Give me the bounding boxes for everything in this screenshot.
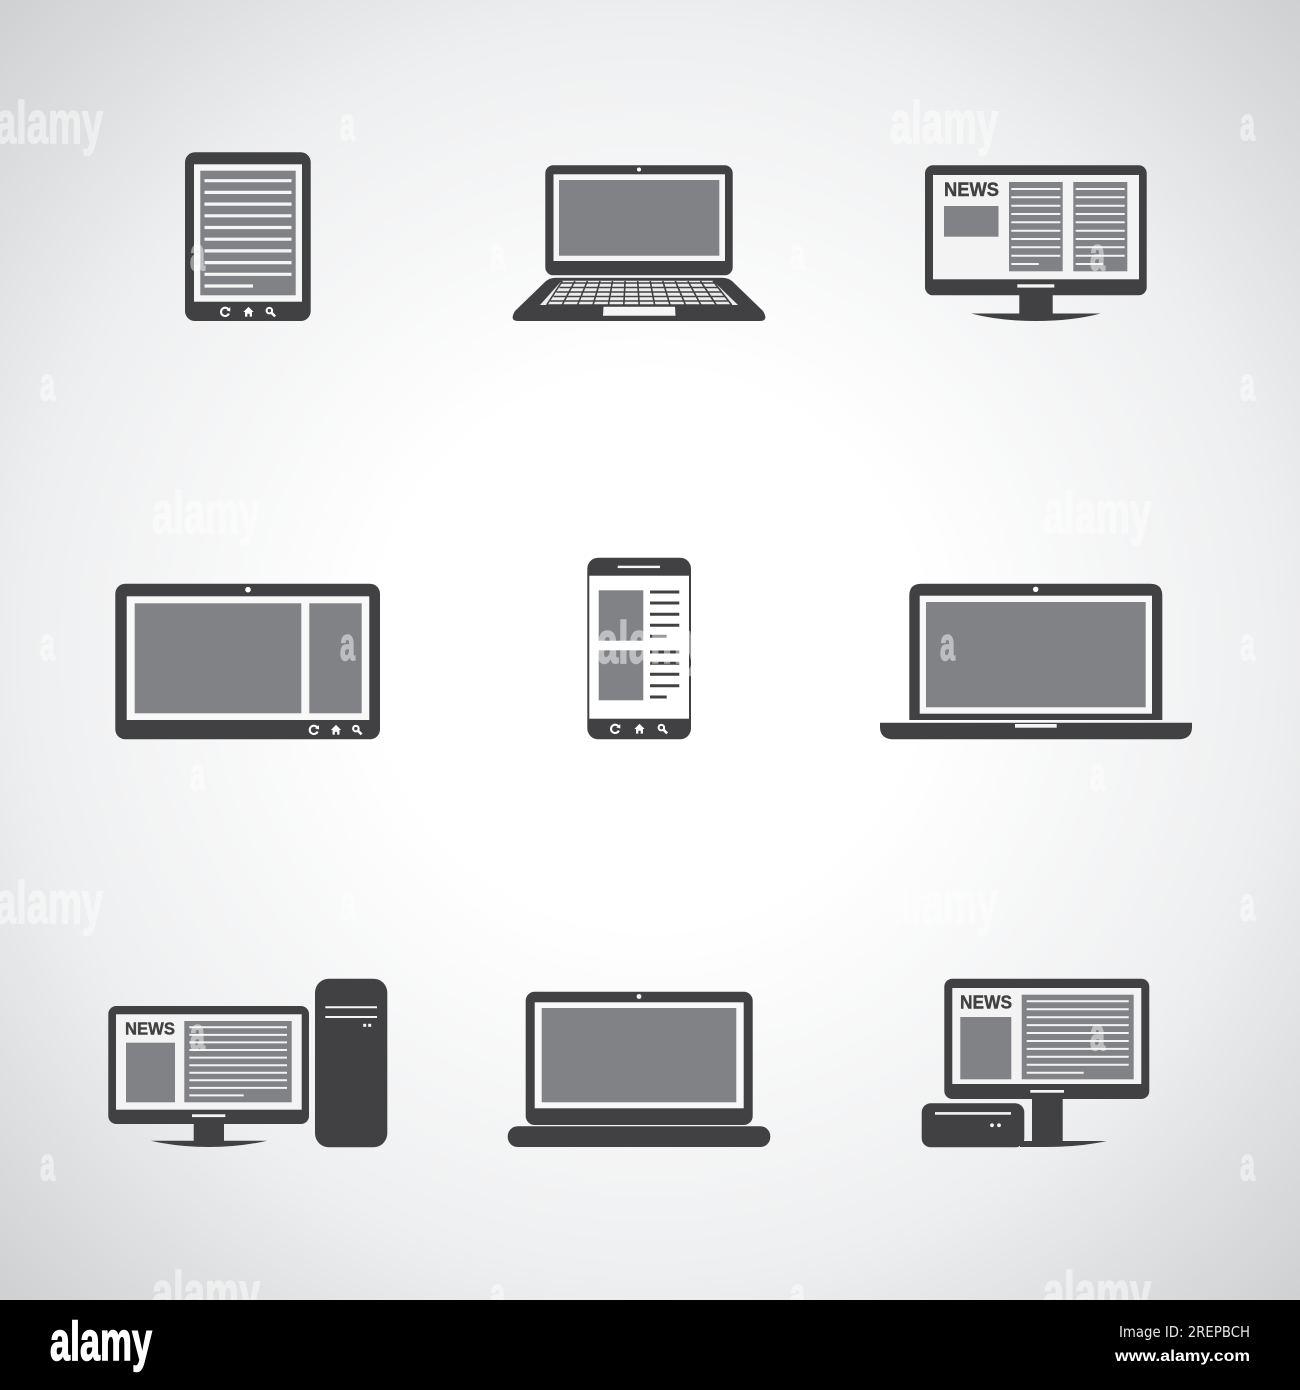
watermark pattern: a bbox=[1240, 1138, 1255, 1190]
watermark pattern: alamy bbox=[1043, 1260, 1151, 1326]
icon: laptop with keyboard bbox=[513, 165, 765, 321]
watermark pattern: alamy bbox=[597, 610, 705, 676]
watermark pattern: a bbox=[490, 228, 505, 280]
watermark pattern: a bbox=[790, 1268, 805, 1320]
watermark pattern: a bbox=[1240, 98, 1255, 150]
icon: landscape tablet bbox=[115, 584, 380, 739]
icon: monitor with mini PC bbox=[922, 979, 1149, 1147]
image id: Image ID: 2REPBCH bbox=[1119, 1323, 1250, 1341]
website: www.alamy.com bbox=[1114, 1348, 1250, 1365]
watermark pattern: a bbox=[1240, 358, 1255, 410]
icon: desktop monitor with news page, two columns bbox=[925, 165, 1147, 321]
watermark pattern: a bbox=[190, 1008, 205, 1060]
watermark pattern: alamy bbox=[0, 90, 103, 156]
watermark pattern: a bbox=[490, 1268, 505, 1320]
watermark pattern: alamy bbox=[152, 480, 260, 546]
watermark pattern: a bbox=[190, 748, 205, 800]
watermark pattern: a bbox=[790, 488, 805, 540]
watermark pattern: a bbox=[1240, 618, 1255, 670]
watermark pattern: a bbox=[340, 878, 355, 930]
watermark pattern: alamy bbox=[1043, 480, 1151, 546]
watermark pattern: a bbox=[940, 618, 955, 670]
watermark pattern: a bbox=[1090, 748, 1105, 800]
icon: slim laptop bbox=[880, 584, 1192, 739]
watermark pattern: a bbox=[490, 488, 505, 540]
watermark pattern: a bbox=[190, 228, 205, 280]
watermark pattern: a bbox=[1090, 1008, 1105, 1060]
watermark pattern: a bbox=[340, 618, 355, 670]
heading: NEWS: NEWS bbox=[944, 180, 999, 201]
watermark pattern: alamy bbox=[0, 870, 103, 936]
watermark pattern: a bbox=[1240, 878, 1255, 930]
watermark pattern: a bbox=[1090, 228, 1105, 280]
watermark pattern: a bbox=[790, 228, 805, 280]
icon: smartphone bbox=[587, 558, 691, 739]
watermark pattern: alamy bbox=[890, 870, 998, 936]
heading: NEWS: NEWS bbox=[125, 1018, 175, 1038]
icon: wide laptop bbox=[508, 992, 770, 1147]
icon: e-reader bbox=[185, 152, 311, 321]
watermark pattern: a bbox=[340, 98, 355, 150]
footer bar bbox=[0, 1300, 1300, 1390]
heading: NEWS: NEWS bbox=[960, 992, 1012, 1012]
watermark pattern: alamy bbox=[890, 90, 998, 156]
watermark pattern: a bbox=[40, 618, 55, 670]
logo: alamy: alamy bbox=[50, 1310, 152, 1372]
watermark pattern: alamy bbox=[152, 1260, 260, 1326]
watermark pattern: a bbox=[40, 1138, 55, 1190]
icon: desktop computer with tower bbox=[108, 979, 387, 1147]
watermark pattern: a bbox=[40, 358, 55, 410]
